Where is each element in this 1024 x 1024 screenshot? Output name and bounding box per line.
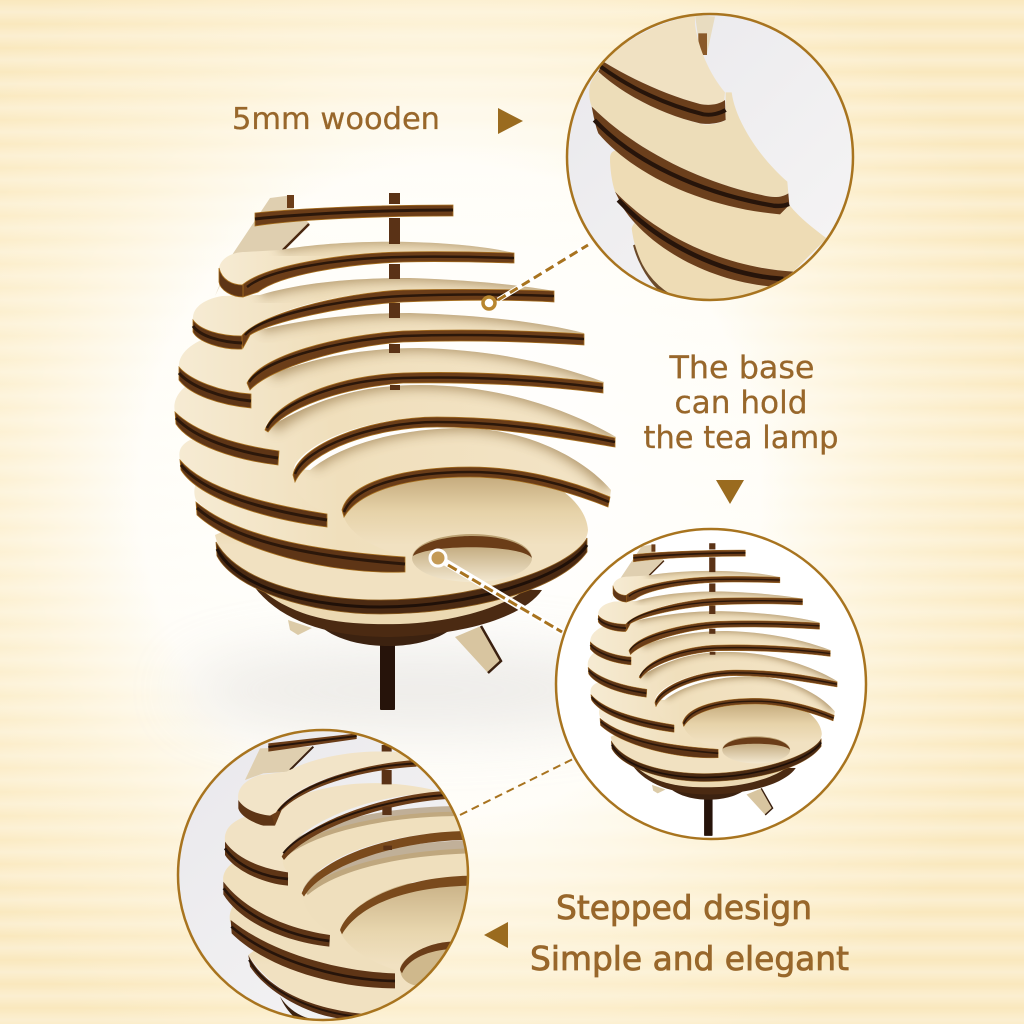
arrow: down to middle inset bbox=[716, 480, 744, 504]
tier 3 bbox=[193, 272, 556, 349]
inset: 5mm wood close-up bbox=[567, 14, 853, 305]
label: 5mm wooden: 5mm wooden bbox=[232, 102, 440, 137]
tier 4 bbox=[179, 307, 586, 408]
tier 2 bbox=[219, 236, 516, 297]
base disc with tea lamp hole bbox=[215, 460, 588, 614]
legs bbox=[288, 620, 501, 710]
tier 5 bbox=[174, 341, 606, 465]
back fin bbox=[215, 195, 310, 296]
tier 1 top bar bbox=[255, 205, 453, 226]
label: the base can hold the tea lamp: can hold bbox=[674, 385, 808, 421]
label: the base can hold the tea lamp: the tea lamp bbox=[644, 420, 838, 456]
main product: spiral wooden lamp bbox=[174, 193, 618, 710]
connector to middle inset bbox=[430, 550, 562, 632]
label: the base can hold the tea lamp bbox=[644, 350, 838, 456]
tier 6 bbox=[179, 378, 618, 527]
tier 7 bbox=[194, 421, 612, 572]
central post bbox=[389, 193, 400, 390]
label: stepped design, simple and elegant bbox=[530, 888, 849, 978]
connector to bottom inset bbox=[460, 759, 573, 815]
connector to top inset bbox=[483, 245, 588, 309]
label: stepped design, simple and elegant: Simple and elegant bbox=[530, 939, 849, 978]
inset: whole lamp with tea lamp base bbox=[556, 529, 866, 839]
inset: stepped design close-up bbox=[178, 730, 470, 1023]
lower bowl tiers bbox=[253, 585, 542, 646]
label: the base can hold the tea lamp: The base bbox=[668, 350, 814, 386]
label: stepped design, simple and elegant: Stepped design bbox=[556, 888, 812, 927]
arrow: left to bottom inset bbox=[484, 922, 508, 948]
arrow: right to top inset bbox=[498, 108, 523, 134]
